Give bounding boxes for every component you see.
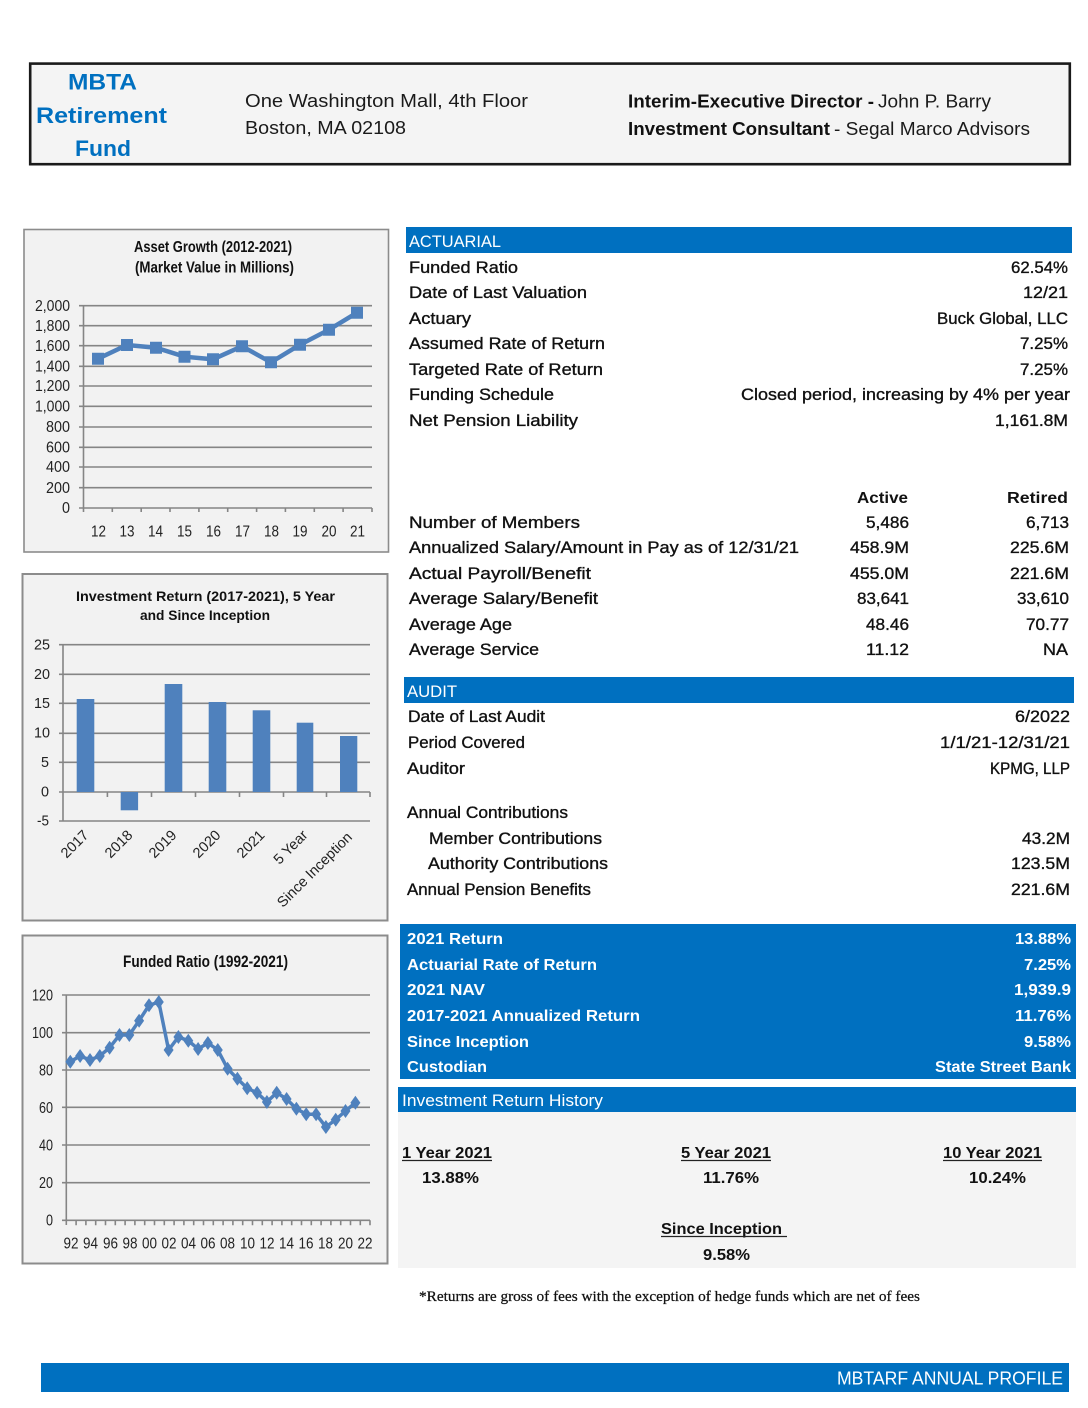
x axis labels: 19 xyxy=(292,524,308,540)
y axis labels: 20 xyxy=(39,1175,53,1192)
x axis labels: 18 xyxy=(318,1236,333,1252)
panel: funded ratio chart xyxy=(22,936,388,1264)
table: members xyxy=(409,490,1069,659)
rows: actuarial values: 7.25% xyxy=(1020,335,1068,353)
rows: key figures: 7.25% xyxy=(1024,957,1071,974)
director and consultant: John P. Barry xyxy=(878,92,991,112)
stat: 5 year: 5 Year 2021 xyxy=(681,1145,771,1162)
stat: 1 year: 13.88% xyxy=(422,1170,479,1187)
x axis labels: 2017 xyxy=(58,828,92,862)
chart title xyxy=(76,588,336,623)
y axis labels: 0 xyxy=(46,1212,53,1230)
director and consultant: Investment Consultant xyxy=(628,119,830,139)
heading: actuarial xyxy=(406,227,1072,253)
rows: member statistics xyxy=(409,514,1069,659)
rows: audit values: Date of Last Audit xyxy=(408,708,545,726)
address: Boston, MA 02108 xyxy=(245,118,406,138)
x axis labels: 5 Year xyxy=(271,827,311,868)
y axis labels: 40 xyxy=(39,1138,53,1154)
stat: 5 year: 11.76% xyxy=(703,1170,759,1187)
stat: since inception xyxy=(661,1221,787,1264)
y axis labels xyxy=(34,638,50,830)
x axis labels: 18 xyxy=(264,524,279,540)
rows: audit values: 123.5M xyxy=(1011,855,1070,873)
panel: actuarial xyxy=(406,227,1072,430)
x axis labels: 00 xyxy=(142,1236,157,1252)
y axis labels: 5 xyxy=(41,755,49,771)
rows: actuarial values: Net Pension Liability xyxy=(409,412,579,430)
rows: member statistics: 70.77 xyxy=(1026,616,1069,634)
rows: member statistics: Average Salary/Benefit xyxy=(409,590,598,608)
rows: member statistics: Number of Members xyxy=(409,514,580,532)
rows: actuarial values: 62.54% xyxy=(1011,259,1068,277)
rows: audit values: Auditor xyxy=(407,760,466,778)
y axis labels: 800 xyxy=(46,419,70,436)
stat: since inception: 9.58% xyxy=(703,1247,750,1264)
rows: audit values: Annual Pension Benefits xyxy=(407,881,591,899)
panel: audit xyxy=(404,677,1074,899)
rows: key figures: State Street Bank xyxy=(935,1059,1071,1076)
rows: actuarial values: Buck Global, LLC xyxy=(937,310,1068,328)
x axis labels: 10 xyxy=(240,1236,255,1252)
rows: key figures: Since Inception xyxy=(407,1034,529,1051)
x axis labels: 94 xyxy=(83,1236,98,1252)
x axis labels: 12 xyxy=(260,1236,274,1252)
y axis labels: 1,600 xyxy=(35,338,70,355)
rows: audit values xyxy=(407,708,1070,899)
panel: investment return chart xyxy=(22,574,388,920)
footnote: *Returns are gross of fees with the exception of hedge funds which are net of fees xyxy=(419,1289,920,1305)
rows: key figures: Actuarial Rate of Return xyxy=(407,957,597,974)
footer bar: MBTARF ANNUAL PROFILE xyxy=(837,1368,1063,1388)
chart title: (Market Value in Millions) xyxy=(135,260,294,276)
y axis labels: 10 xyxy=(34,726,50,742)
heading: audit xyxy=(404,677,1074,703)
rows: key figures xyxy=(407,931,1071,1076)
y axis labels: 120 xyxy=(32,988,53,1004)
y axis labels: 1,800 xyxy=(35,318,70,335)
chart title: and Since Inception xyxy=(140,607,270,623)
address: One Washington Mall, 4th Floor xyxy=(245,91,528,111)
rows: member statistics: NA xyxy=(1043,641,1068,659)
rows: key figures: 1,939.9 xyxy=(1014,982,1071,999)
x axis labels: 21 xyxy=(350,524,365,540)
panel: asset growth chart xyxy=(24,230,388,552)
chart title: Asset Growth (2012-2021) xyxy=(134,239,292,256)
x axis labels: 2019 xyxy=(146,828,180,862)
rows: actuarial values xyxy=(409,259,1071,430)
x axis labels: 06 xyxy=(200,1236,216,1252)
stat: 5 year xyxy=(681,1145,771,1187)
rows: member statistics: 225.6M xyxy=(1010,539,1069,557)
rows: key figures: 13.88% xyxy=(1015,931,1071,948)
x axis labels: 14 xyxy=(279,1236,294,1252)
x axis labels: 17 xyxy=(235,524,250,540)
x axis labels: 16 xyxy=(206,524,221,540)
y axis labels: 1,200 xyxy=(35,378,70,395)
x axis labels: 92 xyxy=(64,1236,78,1252)
x axis labels: 13 xyxy=(120,524,134,540)
x axis labels: 2020 xyxy=(190,828,224,862)
stat: 10 year: 10.24% xyxy=(969,1170,1026,1187)
rows: actuarial values: Actuary xyxy=(409,310,472,328)
x axis labels: 14 xyxy=(148,524,163,540)
rows: actuarial values: 12/21 xyxy=(1023,284,1068,302)
y axis labels: 1,000 xyxy=(35,398,70,416)
rows: member statistics: 221.6M xyxy=(1010,565,1069,583)
rows: member statistics: 33,610 xyxy=(1017,590,1069,608)
rows: actuarial values: Date of Last Valuation xyxy=(409,284,587,302)
rows: key figures: 2017-2021 Annualized Return xyxy=(407,1008,640,1025)
column headers xyxy=(857,490,1068,507)
rows: key figures: 2021 NAV xyxy=(407,982,485,999)
rows: audit values: KPMG, LLP xyxy=(990,760,1070,778)
fund name xyxy=(36,70,168,161)
heading: actuarial: ACTUARIAL xyxy=(409,233,501,251)
x axis labels: 04 xyxy=(181,1236,196,1252)
rows: actuarial values: Funding Schedule xyxy=(409,386,554,404)
heading: audit: AUDIT xyxy=(407,683,457,701)
rows: audit values: 1/1/21-12/31/21 xyxy=(940,734,1070,752)
y axis labels: -5 xyxy=(37,814,49,830)
rows: member statistics: Annualized Salary/Amount in Pay as of 12/31/21 xyxy=(409,539,799,557)
rows: audit values: Member Contributions xyxy=(429,830,602,848)
x axis labels xyxy=(64,1236,372,1252)
x axis labels: 15 xyxy=(177,524,192,540)
rows: audit values: 221.6M xyxy=(1011,881,1070,899)
rows: member statistics: 6,713 xyxy=(1026,514,1069,532)
chart title xyxy=(134,239,294,276)
rows: audit values: Annual Contributions xyxy=(407,804,568,822)
x axis labels: 22 xyxy=(358,1236,372,1252)
rows: audit values: 6/2022 xyxy=(1015,708,1070,726)
rows: key figures: 11.76% xyxy=(1015,1008,1071,1025)
rows: key figures: 2021 Return xyxy=(407,931,503,948)
rows: audit values: Authority Contributions xyxy=(428,855,608,873)
director and consultant xyxy=(628,92,1030,139)
line series: funded ratio xyxy=(65,995,360,1134)
y axis labels: 400 xyxy=(46,459,70,476)
x axis labels: Since Inception xyxy=(274,830,356,911)
rows: member statistics: 458.9M xyxy=(850,539,909,557)
x axis labels xyxy=(91,524,365,540)
line series: market value xyxy=(92,307,363,368)
header box xyxy=(30,64,1070,164)
rows: member statistics: 5,486 xyxy=(866,514,909,532)
rows: actuarial values: Funded Ratio xyxy=(409,259,518,277)
rows: key figures: 9.58% xyxy=(1024,1034,1071,1051)
rows: actuarial values: 7.25% xyxy=(1020,361,1068,379)
y axis labels: 0 xyxy=(62,500,70,517)
rows: member statistics: 11.12 xyxy=(866,641,909,659)
stat: since inception: Since Inception xyxy=(661,1221,782,1238)
fund name: Retirement xyxy=(36,103,168,128)
bars xyxy=(77,684,357,810)
rows: actuarial values: Assumed Rate of Return xyxy=(409,335,605,353)
rows: member statistics: 83,641 xyxy=(857,590,909,608)
x axis labels: 16 xyxy=(298,1236,314,1252)
column headers: Retired xyxy=(1007,490,1068,507)
rows: member statistics: Average Age xyxy=(409,616,512,634)
director and consultant: - Segal Marco Advisors xyxy=(834,119,1030,139)
rows: member statistics: Actual Payroll/Benefit xyxy=(409,565,591,583)
x axis labels: 20 xyxy=(322,524,337,540)
chart title: Investment Return (2017-2021), 5 Year xyxy=(76,588,336,604)
y axis labels: 1,400 xyxy=(35,358,70,376)
stat: 10 year xyxy=(943,1145,1042,1187)
rows: audit values: Period Covered xyxy=(408,734,525,752)
address xyxy=(245,91,528,138)
stat: 1 year xyxy=(402,1145,492,1187)
y axis labels: 60 xyxy=(39,1100,53,1117)
y axis labels: 15 xyxy=(34,696,50,712)
rows: member statistics: 455.0M xyxy=(850,565,909,583)
x axis labels: 20 xyxy=(338,1236,353,1252)
chart title: Funded Ratio (1992-2021) xyxy=(123,952,288,971)
x axis labels: 2018 xyxy=(102,828,136,862)
rows: audit values: 43.2M xyxy=(1022,830,1070,848)
y axis labels xyxy=(32,988,53,1230)
y axis labels: 25 xyxy=(34,638,50,654)
rows: actuarial values: Closed period, increasing by 4% per year xyxy=(741,386,1071,404)
rows: key figures: Custodian xyxy=(407,1059,487,1076)
rows: member statistics: 48.46 xyxy=(866,616,909,634)
fund name: MBTA xyxy=(68,70,137,94)
y axis labels: 20 xyxy=(34,667,50,683)
x axis labels: 02 xyxy=(162,1236,176,1252)
x axis labels: 12 xyxy=(91,524,106,540)
x axis labels: 98 xyxy=(122,1236,138,1252)
director and consultant: Interim-Executive Director - xyxy=(628,92,874,112)
stat: 10 year: 10 Year 2021 xyxy=(943,1145,1042,1162)
panel: key figures xyxy=(400,924,1076,1079)
y axis labels: 2,000 xyxy=(35,298,70,315)
rows: actuarial values: 1,161.8M xyxy=(995,412,1068,430)
y axis labels xyxy=(35,298,70,517)
y axis labels: 200 xyxy=(46,480,70,497)
fund name: Fund xyxy=(75,136,131,161)
y axis labels: 0 xyxy=(41,784,49,800)
stat: 1 year: 1 Year 2021 xyxy=(402,1145,492,1162)
x axis labels: 96 xyxy=(103,1236,118,1252)
x axis labels xyxy=(58,827,356,911)
heading: investment return history: Investment Return History xyxy=(402,1092,604,1110)
rows: actuarial values: Targeted Rate of Return xyxy=(409,361,603,379)
column headers: Active xyxy=(857,490,908,507)
footer bar xyxy=(41,1363,1069,1392)
x axis labels: 08 xyxy=(220,1236,235,1252)
y axis labels: 600 xyxy=(46,440,70,456)
rows: member statistics: Average Service xyxy=(409,641,539,659)
y axis labels: 80 xyxy=(39,1062,53,1080)
y axis labels: 100 xyxy=(32,1025,53,1042)
x axis labels: 2021 xyxy=(234,828,268,862)
panel: investment return history xyxy=(398,1087,1076,1268)
heading: investment return history xyxy=(398,1087,1076,1112)
